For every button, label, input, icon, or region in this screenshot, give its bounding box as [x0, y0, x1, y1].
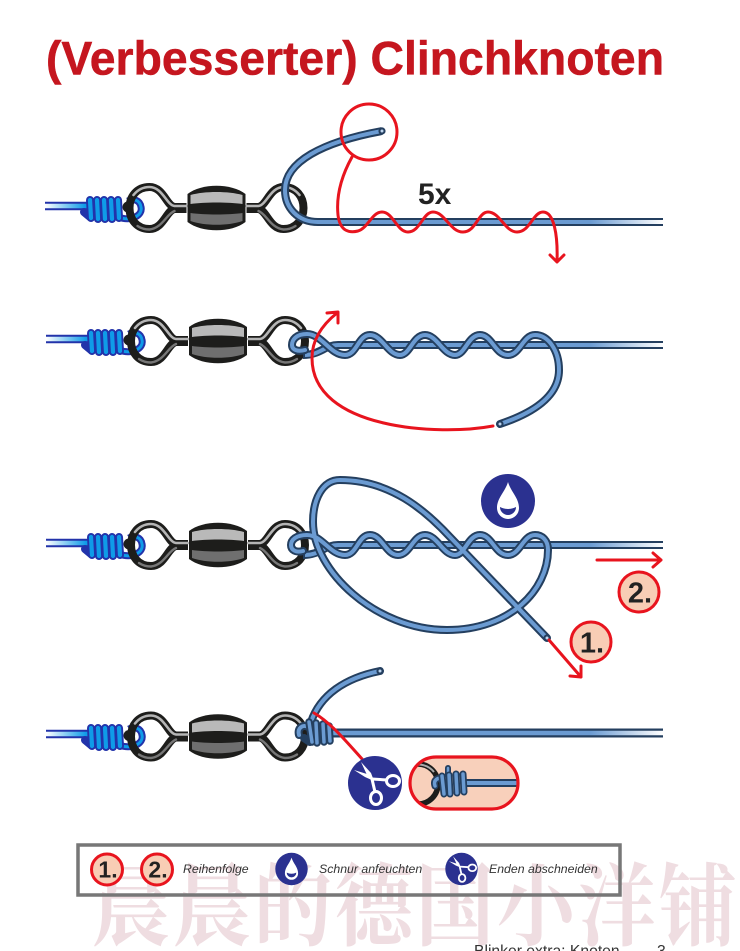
- icon: scissors: [348, 756, 402, 810]
- step 3 loop: [291, 480, 551, 642]
- step 2 leader knot: [46, 333, 142, 352]
- legend: scissors icon: [445, 853, 478, 885]
- legend: number 1: 1.: [98, 856, 118, 882]
- legend box: [78, 845, 620, 895]
- step 1 line with free end: [285, 127, 663, 222]
- step 3 main line: [303, 545, 663, 555]
- step number 1: 1.: [580, 628, 604, 660]
- arrow 1: [549, 640, 581, 677]
- legend: moisten label: Schnur anfeuchten: [319, 862, 422, 876]
- step 4 free end: [311, 667, 384, 722]
- legend: trim label: Enden abschneiden: [489, 862, 598, 876]
- step 4: finished knot and trimming: [46, 667, 663, 810]
- title: (Verbesserter) Clinchknoten: [46, 32, 664, 84]
- legend: number 1: [92, 854, 122, 885]
- detail pill: [398, 757, 520, 809]
- step 4 knot crossing: [124, 730, 134, 741]
- step number 1: [571, 622, 611, 662]
- step 2 main line: [303, 345, 663, 355]
- legend: order label: Reihenfolge: [183, 862, 249, 876]
- step 2 swivel: [131, 319, 305, 363]
- legend: number 2: 2.: [148, 856, 168, 882]
- step 3 leader knot: [46, 537, 142, 556]
- step 2 wrapped line end: [292, 334, 559, 428]
- legend: drop icon: [275, 853, 308, 885]
- step number 2: [619, 572, 659, 612]
- step 2 knot crossing: [124, 334, 134, 346]
- step 1 swivel: [130, 186, 304, 230]
- step 4 main line: [330, 728, 663, 738]
- step 4 knot: [299, 722, 330, 743]
- step 1 knot crossing: [122, 202, 134, 212]
- step 2 red arrow: [312, 312, 493, 430]
- step 3: pulling the knot tight: [46, 474, 663, 677]
- legend: number 2: [142, 854, 172, 885]
- 5x label: 5x: [418, 178, 452, 211]
- red circle around line end: [341, 104, 397, 160]
- arrow 2: [597, 553, 661, 567]
- icon: water drop: [481, 474, 535, 528]
- step 2: wraps and threading the eye: [46, 312, 663, 430]
- red wrapping arrow: [338, 157, 564, 262]
- step 1: swivel with line and wrap instruction: [45, 104, 663, 262]
- step 3 swivel: [131, 523, 305, 567]
- red cut line: [314, 713, 363, 760]
- step 3 knot crossing: [124, 538, 134, 550]
- step number 2: 2.: [628, 578, 652, 610]
- step 4 leader knot: [46, 728, 142, 747]
- step 1 leader knot: [45, 200, 141, 219]
- step 4 swivel: [131, 714, 305, 759]
